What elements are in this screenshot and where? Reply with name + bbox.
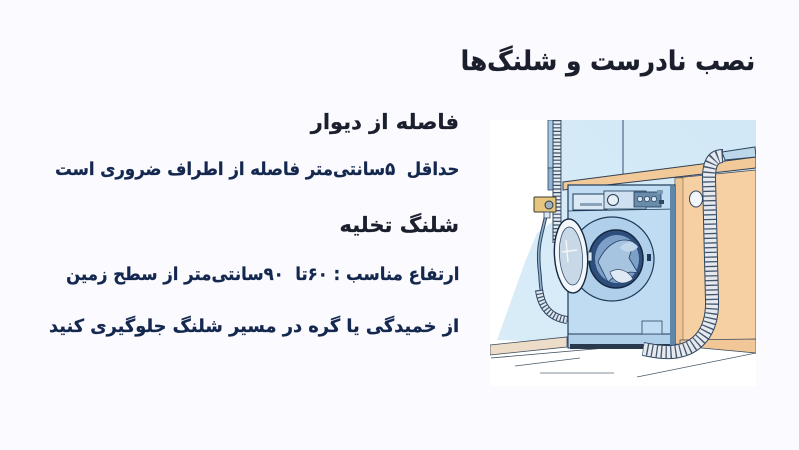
title: نصب نادرست و شلنگ‌ها xyxy=(460,46,755,77)
drain hose xyxy=(643,156,723,352)
text block: wall distance xyxy=(55,110,459,180)
drum xyxy=(582,216,655,302)
access panel xyxy=(642,321,662,334)
washing machine xyxy=(552,185,675,349)
control panel xyxy=(573,190,664,210)
room background xyxy=(490,120,756,386)
cabinet and countertop xyxy=(563,147,756,353)
heading: drain hose: شلنگ تخلیه xyxy=(339,213,459,237)
cold water hose and wall valve xyxy=(534,120,568,320)
body line: avoid kinks: از خمیدگی یا گره در مسیر شلنگ جلوگیری کنید xyxy=(49,316,459,337)
body line: suitable height: ارتفاع مناسب : ۶۰تا ۹۰سانتی‌متر از سطح زمین xyxy=(66,264,459,285)
body line: minimum clearance: حداقل ۵سانتی‌متر فاصله از اطراف ضروری است xyxy=(55,159,459,180)
illustration: washing machine with hoses xyxy=(490,120,756,378)
text block: drain hose xyxy=(49,212,459,337)
open door xyxy=(552,218,592,294)
heading: wall distance: فاصله از دیوار xyxy=(311,110,459,134)
